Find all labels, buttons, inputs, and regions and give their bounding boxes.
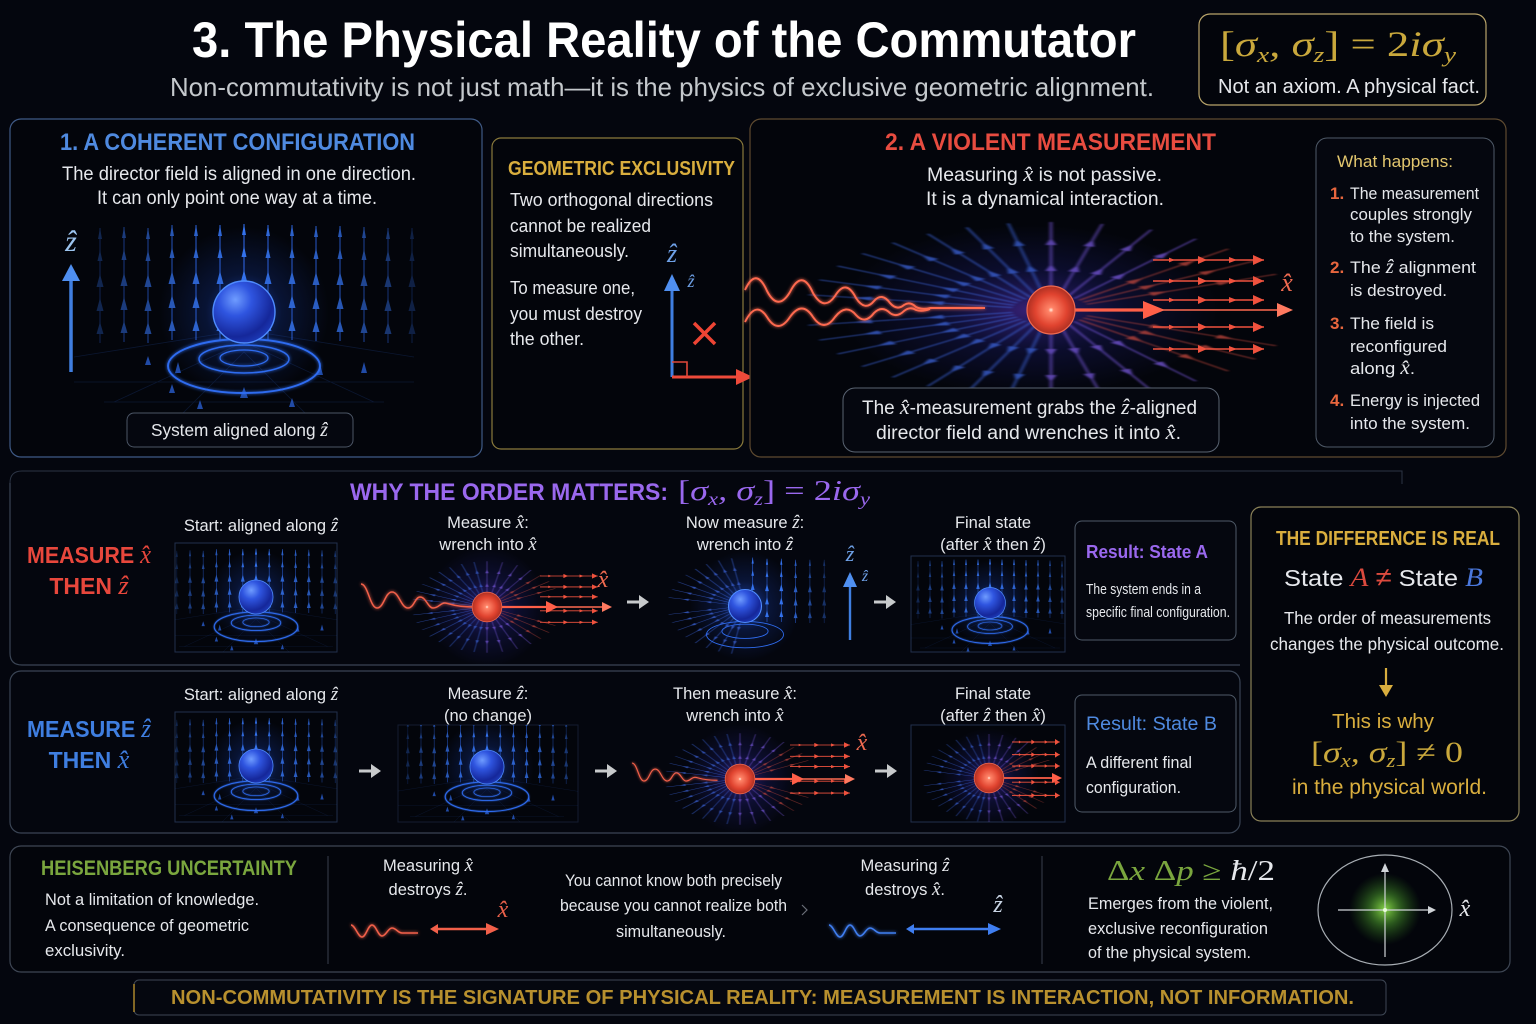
step: measure x <box>361 512 612 667</box>
description: A consequence of geometric <box>45 916 249 935</box>
incoming measurement waves <box>745 278 985 326</box>
middle statement: because you cannot realize both <box>560 897 787 915</box>
step 4 <box>1330 391 1480 433</box>
measuring z: Measuring ẑ <box>860 855 950 876</box>
orthogonal axes <box>664 239 753 385</box>
step: now measure z: wrench into ẑ <box>696 534 794 555</box>
text <box>510 190 713 349</box>
heading: HEISENBERG UNCERTAINTY <box>41 857 297 880</box>
step 1: The measurement <box>1350 184 1479 203</box>
commutator formula: [σ <box>1220 24 1253 64</box>
step 3: The field is <box>1350 314 1434 333</box>
panel: a violent measurement <box>745 119 1506 457</box>
section heading: iσ <box>832 475 854 507</box>
step: measure z no change: (no change) <box>444 707 532 725</box>
orthogonal axes: ẑ <box>666 239 678 268</box>
down arrow <box>1379 668 1393 697</box>
step: then measure x <box>632 683 868 834</box>
measuring x: x̂ <box>497 897 509 923</box>
step 4: Energy is injected <box>1350 391 1480 410</box>
panel: why the order matters, sequence x then z <box>10 471 1402 667</box>
result A box <box>1075 521 1236 640</box>
conclusion: z <box>1385 751 1396 772</box>
what happens heading: What happens: <box>1337 152 1453 171</box>
description: It is a dynamical interaction. <box>926 189 1164 210</box>
panel: heisenberg uncertainty <box>10 846 1510 972</box>
result B box: Result: State B <box>1086 714 1217 735</box>
section heading: y <box>857 489 870 509</box>
description: exclusivity. <box>45 941 125 960</box>
result A box: specific final configuration. <box>1086 604 1230 621</box>
title: 3. The Physical Reality of the Commutator <box>192 12 1136 68</box>
step: then measure x: x̂ <box>856 730 868 756</box>
result A box: The system ends in a <box>1086 581 1202 598</box>
explanation: changes the physical outcome. <box>1270 634 1504 654</box>
text: Two orthogonal directions <box>510 190 713 210</box>
z axis arrow: ẑ <box>64 225 77 258</box>
orthogonal axes: ẑ <box>686 271 695 291</box>
step 3: along x̂. <box>1350 358 1415 379</box>
field wrenched around red sphere <box>807 222 1293 398</box>
heading: 2. A VIOLENT MEASUREMENT <box>885 129 1216 156</box>
section heading: [σ <box>678 475 704 507</box>
section heading: ] = 2 <box>763 475 832 507</box>
middle statement <box>560 872 787 941</box>
middle statement: You cannot know both precisely <box>565 872 783 890</box>
description <box>62 164 416 209</box>
step: measure x: wrench into x̂ <box>438 534 537 555</box>
step: now measure z: ẑ <box>861 568 869 585</box>
step: then measure x: wrench into x̂ <box>685 705 784 726</box>
commutator formula: x <box>1256 42 1269 67</box>
step: now measure z: ẑ <box>845 541 855 566</box>
caption: system aligned: System aligned along ẑ <box>151 419 328 441</box>
measuring x: destroys ẑ. <box>389 879 467 900</box>
step 1 <box>1330 184 1479 246</box>
text: cannot be realized <box>510 216 651 236</box>
formula description: of the physical system. <box>1088 943 1251 962</box>
section heading <box>350 475 870 509</box>
step: now measure z <box>668 512 869 661</box>
commutator formula: iσ <box>1409 24 1437 64</box>
step: final state B <box>911 685 1065 828</box>
section heading: WHY THE ORDER MATTERS: <box>350 479 668 506</box>
step 2: is destroyed. <box>1350 281 1447 300</box>
text: To measure one, <box>510 278 635 298</box>
step: final state B: (after ẑ then x̂) <box>940 705 1046 726</box>
arrow <box>359 764 381 778</box>
description: Not a limitation of knowledge. <box>45 890 259 909</box>
formula description: exclusive reconfiguration <box>1088 919 1268 938</box>
result B box: configuration. <box>1086 778 1181 797</box>
step 4: 4. <box>1330 391 1344 410</box>
step 4: into the system. <box>1350 414 1470 433</box>
conclusion <box>1292 711 1487 799</box>
director field illustration <box>74 224 416 422</box>
footer banner: NON-COMMUTATIVITY IS THE SIGNATURE OF PHYSICAL REALITY: MEASUREMENT IS INTERACTION, NOT INFORMATION. <box>171 987 1354 1009</box>
measuring z: destroys x̂. <box>865 879 945 900</box>
step 3 <box>1330 314 1447 379</box>
footer banner <box>134 980 1386 1015</box>
arrow <box>595 764 617 778</box>
step 2: The ẑ alignment <box>1350 257 1476 278</box>
conclusion: , σ <box>1351 736 1388 769</box>
measuring x <box>351 855 509 937</box>
z axis arrow <box>62 225 80 372</box>
row label: measure x then z: THEN ẑ <box>49 570 129 600</box>
step 1: 1. <box>1330 184 1344 203</box>
conclusion: [σ <box>1311 736 1338 769</box>
formula caption: Not an axiom. A physical fact. <box>1218 76 1480 98</box>
step: start aligned: Start: aligned along ẑ <box>184 684 339 705</box>
text: simultaneously. <box>510 241 629 261</box>
result A box: Result: State A <box>1086 542 1208 562</box>
section heading: , σ <box>718 475 756 507</box>
commutator formula: y <box>1441 42 1456 67</box>
section heading: x <box>707 489 718 509</box>
formula box <box>1199 14 1486 105</box>
subtitle: Non-commutativity is not just math—it is the physics of exclusive geometric alignment. <box>170 72 1154 102</box>
result B box: A different final <box>1086 753 1192 772</box>
conclusion: This is why <box>1332 711 1434 733</box>
commutator formula: z <box>1312 42 1325 67</box>
step: then measure x: Then measure x̂: <box>673 683 797 704</box>
phase-space diagram: x̂ <box>1459 896 1471 922</box>
result B box <box>1075 695 1236 812</box>
arrow <box>875 764 897 778</box>
panel: geometric exclusivity <box>492 138 753 449</box>
panel: the difference is real <box>1251 507 1519 821</box>
step 3: reconfigured <box>1350 337 1447 356</box>
measuring x: Measuring x̂ <box>383 855 474 876</box>
caption: measurement grabs: director field and wrenches it into x̂. <box>876 420 1181 444</box>
step: now measure z: Now measure ẑ: <box>686 512 804 533</box>
measuring z <box>829 855 1003 937</box>
step 2 <box>1330 257 1476 300</box>
step: final state A: (after x̂ then ẑ) <box>940 534 1046 555</box>
caption: measurement grabs: The x̂-measurement grabs the ẑ-aligned <box>862 395 1197 419</box>
heading: 1. A COHERENT CONFIGURATION <box>60 129 415 156</box>
conclusion: in the physical world. <box>1292 776 1487 799</box>
step 2: 2. <box>1330 258 1344 277</box>
uncertainty formula: Δx Δp ≥ ħ/2 <box>1107 856 1275 887</box>
step: start aligned <box>174 518 338 652</box>
state inequality: State A ≠ State B <box>1284 562 1483 592</box>
text: the other. <box>510 329 584 349</box>
panel: sequence z then x <box>10 671 1240 834</box>
row label: measure z then x: THEN x̂ <box>49 744 130 774</box>
step 1: to the system. <box>1350 227 1455 246</box>
step: measure z no change <box>394 683 580 828</box>
description <box>45 890 259 960</box>
step 1: couples strongly <box>1350 205 1472 224</box>
description: The director field is aligned in one direction. <box>62 164 416 185</box>
caption: measurement grabs <box>843 388 1219 452</box>
measuring z: ẑ <box>992 892 1003 918</box>
formula description <box>1088 894 1273 962</box>
row label: measure x then z: MEASURE x̂ <box>27 539 151 569</box>
middle statement: simultaneously. <box>616 923 726 941</box>
phase-space diagram <box>1318 855 1471 965</box>
step: start aligned: Start: aligned along ẑ <box>184 515 339 536</box>
step: measure x: Measure x̂: <box>447 512 529 533</box>
step: start aligned <box>174 686 338 822</box>
explanation: The order of measurements <box>1284 608 1491 628</box>
formula description: Emerges from the violent, <box>1088 894 1273 913</box>
row label: measure x then z <box>27 539 151 600</box>
chevron <box>802 905 807 915</box>
explanation <box>1270 608 1504 654</box>
commutator formula: , σ <box>1269 24 1315 64</box>
x axis label: x̂ <box>1280 268 1293 297</box>
step: measure z no change: Measure ẑ: <box>448 683 528 704</box>
panel: a coherent configuration <box>10 119 482 457</box>
step 3: 3. <box>1330 314 1344 333</box>
description: It can only point one way at a time. <box>97 188 377 209</box>
arrow <box>874 595 896 609</box>
panel: what happens <box>1316 138 1494 447</box>
conclusion: x <box>1340 751 1351 772</box>
caption: system aligned <box>127 413 353 447</box>
row label: measure z then x <box>27 713 152 774</box>
section heading: z <box>753 489 763 509</box>
description: Measuring x̂ is not passive. <box>927 162 1162 186</box>
conclusion: ] ≠ 0 <box>1395 736 1463 769</box>
commutator formula: ] = 2 <box>1324 24 1409 64</box>
heading: GEOMETRIC EXCLUSIVITY <box>508 158 736 180</box>
arrow <box>627 595 649 609</box>
step: final state A <box>910 516 1066 652</box>
text: you must destroy <box>510 304 642 324</box>
heading: THE DIFFERENCE IS REAL <box>1276 528 1500 550</box>
step: final state A: Final state <box>955 514 1031 532</box>
step: final state B: Final state <box>955 685 1031 703</box>
row label: measure z then x: MEASURE ẑ <box>27 713 152 743</box>
description <box>926 162 1164 210</box>
step: measure x: x̂ <box>597 567 609 593</box>
